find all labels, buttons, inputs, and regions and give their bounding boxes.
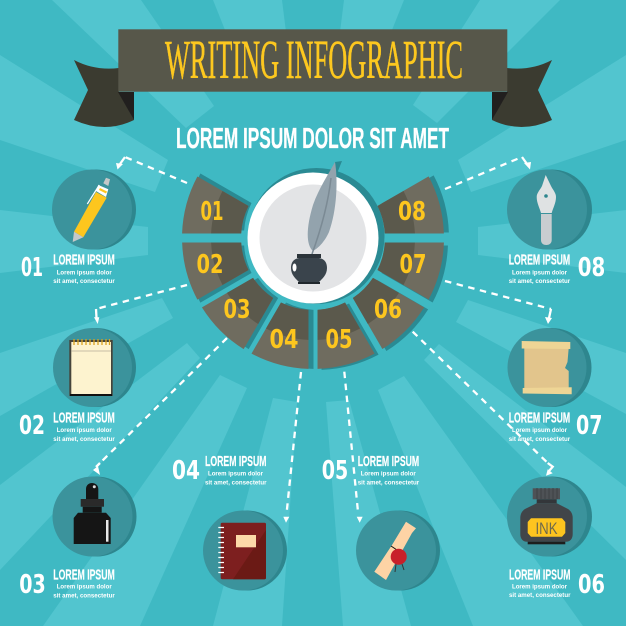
segment numbers: 02 — [196, 250, 224, 280]
icon: notebook — [218, 523, 266, 579]
icon: quill and inkwell — [291, 161, 342, 284]
panel: item 01 pen — [21, 170, 136, 285]
label: sit amet, consectetur — [53, 436, 115, 443]
segment shadows — [172, 174, 462, 383]
label: Lorem ipsum dolor — [512, 583, 567, 590]
label: Lorem ipsum dolor — [57, 584, 112, 591]
ribbon right tail — [492, 60, 552, 127]
panel: item 04 notebook — [172, 453, 287, 590]
label: sit amet, consectetur — [509, 278, 571, 285]
icon: fountain pen nib — [537, 175, 556, 245]
ribbon left tail — [74, 60, 134, 127]
segment numbers: 06 — [374, 295, 402, 325]
label — [509, 409, 603, 443]
label: LOREM IPSUM — [509, 566, 570, 583]
label: LOREM IPSUM — [509, 409, 570, 426]
label — [172, 453, 267, 486]
subtitle: LOREM IPSUM DOLOR SIT AMET — [176, 123, 449, 155]
label: Lorem ipsum dolor — [57, 427, 112, 434]
icon circle — [53, 328, 136, 407]
arrowheads — [93, 157, 553, 523]
label: sit amet, consectetur — [358, 479, 420, 486]
segments outer — [169, 176, 457, 382]
central disc — [248, 168, 384, 304]
panel: item 05 rolled scroll — [322, 453, 440, 590]
label: 06 — [578, 570, 605, 600]
label: LOREM IPSUM — [509, 252, 570, 268]
label: LOREM IPSUM — [358, 453, 419, 470]
label: Lorem ipsum dolor — [361, 470, 416, 477]
central wheel — [169, 161, 462, 383]
segments inner shading — [201, 191, 425, 350]
label: sit amet, consectetur — [509, 436, 571, 443]
icon: notepad — [69, 339, 113, 396]
label: LOREM IPSUM — [53, 566, 115, 584]
icon: parchment — [522, 341, 572, 394]
label: 07 — [576, 411, 603, 441]
segment numbers: 01 — [200, 197, 224, 227]
icon circle — [507, 476, 592, 556]
panel: item 07 parchment — [508, 328, 603, 443]
icon: dropper bottle — [74, 483, 111, 544]
label — [19, 410, 115, 443]
segment numbers: 03 — [224, 295, 250, 325]
label — [21, 252, 115, 285]
label: 02 — [19, 411, 45, 441]
label: 03 — [19, 570, 46, 600]
label: sit amet, consectetur — [205, 479, 267, 486]
icon circle — [52, 170, 136, 250]
title banner — [74, 29, 552, 127]
label: sit amet, consectetur — [509, 592, 571, 599]
label — [509, 252, 605, 285]
label — [322, 453, 420, 486]
icon: pen — [73, 178, 110, 242]
label: 05 — [322, 456, 348, 486]
label: 08 — [578, 253, 605, 283]
dashed connector arrows — [96, 157, 551, 512]
icon: rolled scroll with seal — [374, 522, 416, 580]
label: Lorem ipsum dolor — [208, 471, 263, 478]
label: Lorem ipsum dolor — [512, 427, 567, 434]
label: Lorem ipsum dolor — [57, 270, 112, 276]
panel: item 03 dropper bottle — [19, 476, 136, 600]
icon circle — [356, 510, 440, 590]
label: LOREM IPSUM — [53, 252, 115, 268]
label: sit amet, consectetur — [53, 592, 115, 600]
segment numbers: 08 — [398, 197, 426, 227]
segment numbers: 04 — [270, 325, 298, 355]
label: Lorem ipsum dolor — [512, 270, 567, 276]
label: sit amet, consectetur — [53, 278, 115, 285]
icon circle — [52, 476, 136, 556]
icon circle — [508, 328, 592, 407]
segment numbers — [196, 197, 426, 355]
label: LOREM IPSUM — [205, 453, 266, 470]
label — [509, 566, 605, 600]
icon circle — [203, 510, 287, 590]
icon: ink bottle: INK — [536, 519, 558, 538]
icon circle — [507, 170, 592, 250]
label — [19, 566, 115, 600]
panel: item 06 ink bottle — [507, 476, 605, 600]
segment numbers: 07 — [400, 250, 426, 280]
panel: item 08 fountain pen nib — [507, 170, 605, 285]
label: 01 — [21, 253, 43, 283]
label: LOREM IPSUM — [53, 410, 115, 426]
panel: item 02 notepad — [19, 328, 136, 443]
segment numbers: 05 — [326, 325, 352, 355]
label: 04 — [172, 456, 200, 486]
